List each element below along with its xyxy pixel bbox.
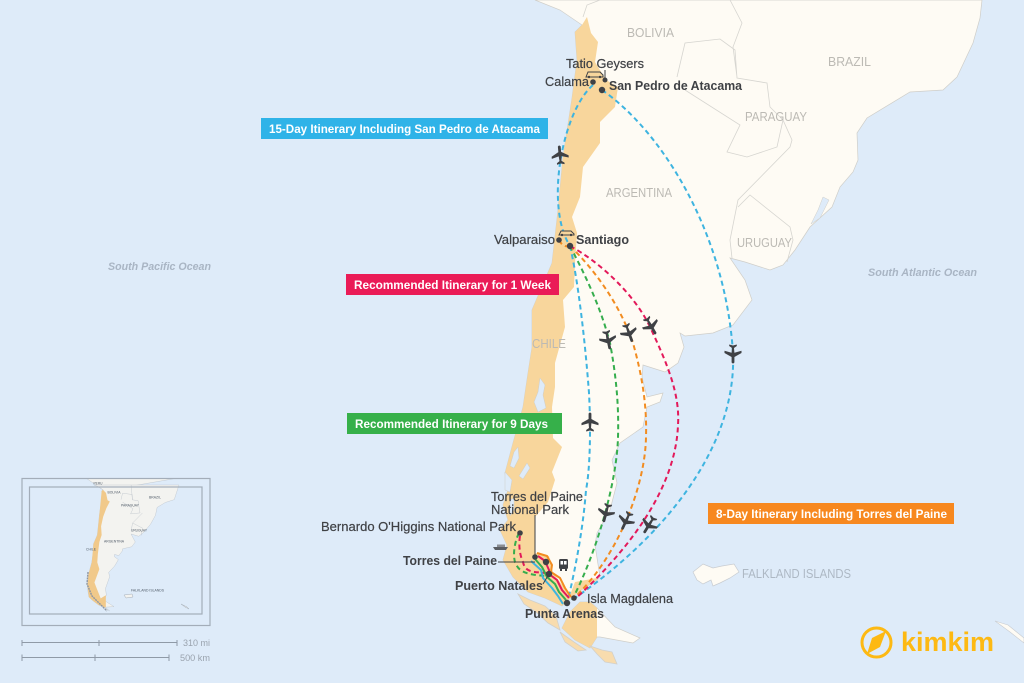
scale bars	[22, 638, 210, 664]
place labels: Valparaiso	[494, 232, 555, 247]
leader lines	[498, 70, 605, 584]
dashed flight routes	[514, 85, 733, 600]
country and ocean labels: BOLIVIA	[627, 25, 674, 40]
place labels: Calama	[545, 74, 590, 89]
place labels: Torres del Paine	[403, 553, 497, 568]
inset locator map: FALKLAND ISLANDS	[131, 588, 164, 592]
logo: kimkim: kimkim	[901, 627, 994, 657]
place labels: Torres del Paine	[491, 489, 583, 504]
country and ocean labels: CHILE	[532, 336, 566, 351]
icon: car at Santiago	[559, 231, 574, 236]
place labels: National Park	[491, 502, 569, 517]
inset locator map: URUGUAY	[131, 528, 147, 532]
plane icons	[551, 145, 742, 538]
legend label: 1 Week: Recommended Itinerary for 1 Week	[354, 278, 551, 292]
scale bars: 500 km	[180, 653, 210, 664]
legend label: 9 Days: Recommended Itinerary for 9 Days	[355, 417, 548, 431]
country and ocean labels: ARGENTINA	[606, 185, 672, 200]
place labels	[321, 56, 743, 621]
icon: car at Tatio	[586, 72, 603, 78]
map: country borders	[583, 0, 793, 262]
icon: boat	[493, 544, 508, 550]
country and ocean labels: FALKLAND ISLANDS	[742, 566, 851, 581]
inset locator map: PARAGUAY	[121, 504, 139, 508]
inset locator map: PERU	[94, 482, 103, 486]
ground routes to Puerto Natales	[531, 553, 571, 604]
place labels: Santiago	[576, 232, 629, 247]
place labels: Bernardo O'Higgins National Park	[321, 519, 516, 534]
legend label: 15-Day Itinerary	[261, 118, 548, 139]
country and ocean labels: BRAZIL	[828, 54, 871, 69]
place labels: Tatio Geysers	[566, 56, 644, 71]
map: Chilean Tierra del Fuego	[562, 602, 597, 648]
country and ocean labels: South Atlantic Ocean	[868, 267, 977, 279]
place labels: Isla Magdalena	[587, 591, 674, 606]
legend label: 8-Day Itinerary	[708, 503, 954, 524]
legend label: 1 Week	[346, 274, 559, 295]
map: South America land	[500, 0, 1024, 664]
map: Chile	[500, 17, 618, 606]
inset locator map	[22, 478, 210, 626]
place labels: San Pedro de Atacama	[609, 78, 743, 93]
map: Falkland Islands	[693, 564, 739, 586]
place labels: Punta Arenas	[525, 606, 604, 621]
map: southern islands	[518, 594, 617, 664]
country and ocean labels: URUGUAY	[737, 235, 792, 250]
map: South Georgia	[995, 621, 1024, 643]
inset locator map: BOLIVIA	[108, 490, 121, 494]
inset locator map: ARGENTINA	[104, 540, 124, 544]
map: Tierra del Fuego	[562, 602, 640, 648]
legend label: 9 Days	[347, 413, 562, 434]
country and ocean labels: South Pacific Ocean	[108, 261, 211, 273]
scale bars: 310 mi	[183, 638, 210, 649]
inset locator map: BRAZIL	[149, 496, 161, 500]
legend label: 15-Day Itinerary: 15-Day Itinerary Including San Pedro de Atacama	[269, 122, 540, 136]
icon: bus	[559, 559, 568, 571]
map: inlets and island channels	[505, 197, 829, 516]
legend label: 8-Day Itinerary: 8-Day Itinerary Including Torres del Paine	[716, 507, 947, 521]
location markers	[517, 78, 608, 606]
inset locator map: CHILE	[86, 548, 96, 552]
country and ocean labels: PARAGUAY	[745, 109, 807, 124]
place labels: Puerto Natales	[455, 578, 543, 593]
country and ocean labels	[108, 25, 977, 581]
